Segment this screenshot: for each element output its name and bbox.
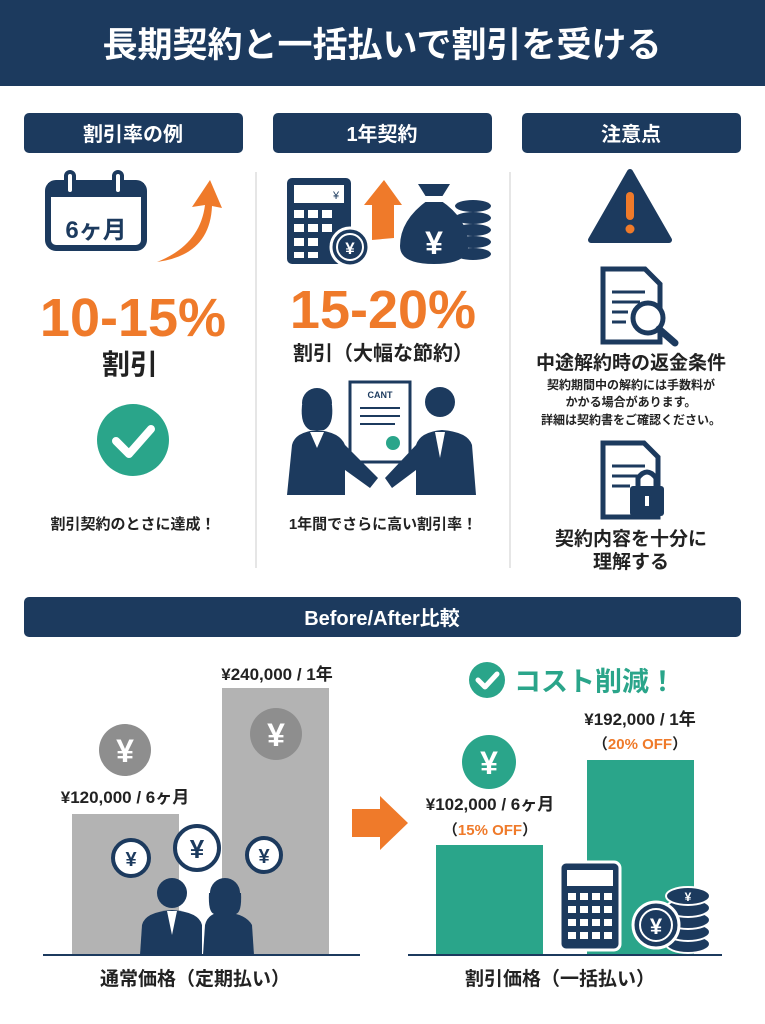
text: 割引: 割引 xyxy=(102,349,158,380)
icon: handshake people: CANT xyxy=(368,390,393,400)
icon: warning xyxy=(591,172,669,240)
icon: coin stack xyxy=(633,887,710,953)
icon: yen speech bubbles: ¥ xyxy=(125,849,137,871)
text: caption: 割引契約のとさに達成！ xyxy=(50,515,216,533)
label: 通常価格（定期払い）: 通常価格（定期払い） xyxy=(100,968,290,990)
callout: コスト削減！ xyxy=(469,662,676,698)
title xyxy=(0,0,765,86)
label: ¥192,000: ¥192,000 / 1年 xyxy=(584,709,696,729)
header: 割引率の例: 割引率の例 xyxy=(83,123,183,146)
icon: check xyxy=(97,404,169,476)
text: 契約内容を十分に理解する: 契約内容を十分に xyxy=(555,528,707,550)
header: 注意点 xyxy=(522,113,741,153)
header: Before/After比較: Before/After比較 xyxy=(304,607,460,630)
icon: calendar xyxy=(48,172,144,248)
header: 1年契約: 1年契約 xyxy=(346,123,418,146)
icon: calculator and coin: ¥ xyxy=(345,239,355,258)
icon: orange arrow xyxy=(157,180,222,262)
text: notice: 契約期間中の解約には手数料が xyxy=(547,377,715,392)
icon: coin stack: ¥ xyxy=(650,914,663,939)
chart: before xyxy=(43,664,360,955)
icon: people xyxy=(140,878,254,955)
label: 割引価格（一括払い）: 割引価格（一括払い） xyxy=(465,968,655,990)
icon: gray yen coins: ¥ xyxy=(116,733,134,769)
label: ¥240,000: ¥240,000 / 1年 xyxy=(221,664,333,684)
text: notice: 詳細は契約書をご確認ください。 xyxy=(541,412,721,427)
icon: yen speech bubbles xyxy=(113,826,281,876)
label: ¥192,000: （20% OFF） xyxy=(593,736,687,753)
text: 割引（大幅な節約）: 割引（大幅な節約） xyxy=(293,342,473,365)
icon: calculator and coin xyxy=(287,178,369,266)
icon: coin stack: ¥ xyxy=(685,890,692,904)
icon: gray yen coins xyxy=(99,708,302,776)
text: notice xyxy=(541,377,721,427)
arrow: before to after xyxy=(352,796,408,850)
header: 割引率の例 xyxy=(24,113,243,153)
text: 15-20%: 15-20% xyxy=(290,280,476,340)
text: 契約内容を十分に理解する xyxy=(555,528,707,573)
text: caption: 1年間でさらに高い割引率！ xyxy=(289,515,477,533)
title: 長期契約と一括払いで割引を受ける xyxy=(103,26,661,65)
icon: orange up arrow xyxy=(364,180,402,240)
label: ¥102,000: ¥102,000 / 6ヶ月 xyxy=(426,795,554,814)
icon: green yen coin xyxy=(462,735,516,789)
icon: yen speech bubbles: ¥ xyxy=(258,846,270,868)
icon: gray yen coins: ¥ xyxy=(267,717,285,753)
icon: money bag and coins: ¥ xyxy=(425,225,443,261)
chart: after xyxy=(408,662,722,955)
icon: handshake people xyxy=(287,382,476,495)
icon: green yen coin: ¥ xyxy=(480,745,498,781)
label: ¥102,000 xyxy=(426,795,554,839)
text: 10-15%: 10-15% xyxy=(40,288,226,348)
icon: calculator and coin: ¥ xyxy=(332,190,340,202)
icon: document with magnifier xyxy=(603,269,675,343)
label: ¥192,000 xyxy=(584,709,696,753)
header: 1年契約 xyxy=(273,113,492,153)
icon: money bag and coins xyxy=(400,184,491,264)
icon: document with lock xyxy=(603,443,664,517)
icon: calendar: 6ヶ月 xyxy=(65,217,127,244)
text: notice: かかる場合があります。 xyxy=(566,394,696,409)
text: 契約内容を十分に理解する: 理解する xyxy=(593,551,669,573)
panel: 注意点 xyxy=(536,172,726,573)
panel: 割引率の例 xyxy=(40,172,226,533)
header: 注意点: 注意点 xyxy=(601,123,661,146)
callout: コスト削減！: コスト削減！ xyxy=(514,667,676,697)
panel: 1年契約 xyxy=(287,178,491,533)
header: Before/After比較 xyxy=(24,597,741,637)
label: ¥102,000: （15% OFF） xyxy=(443,822,537,839)
text: 中途解約時の返金条件: 中途解約時の返金条件 xyxy=(536,352,726,374)
label: ¥120,000: ¥120,000 / 6ヶ月 xyxy=(61,788,189,807)
icon: yen speech bubbles: ¥ xyxy=(190,834,205,864)
icon: calculator xyxy=(560,862,620,950)
